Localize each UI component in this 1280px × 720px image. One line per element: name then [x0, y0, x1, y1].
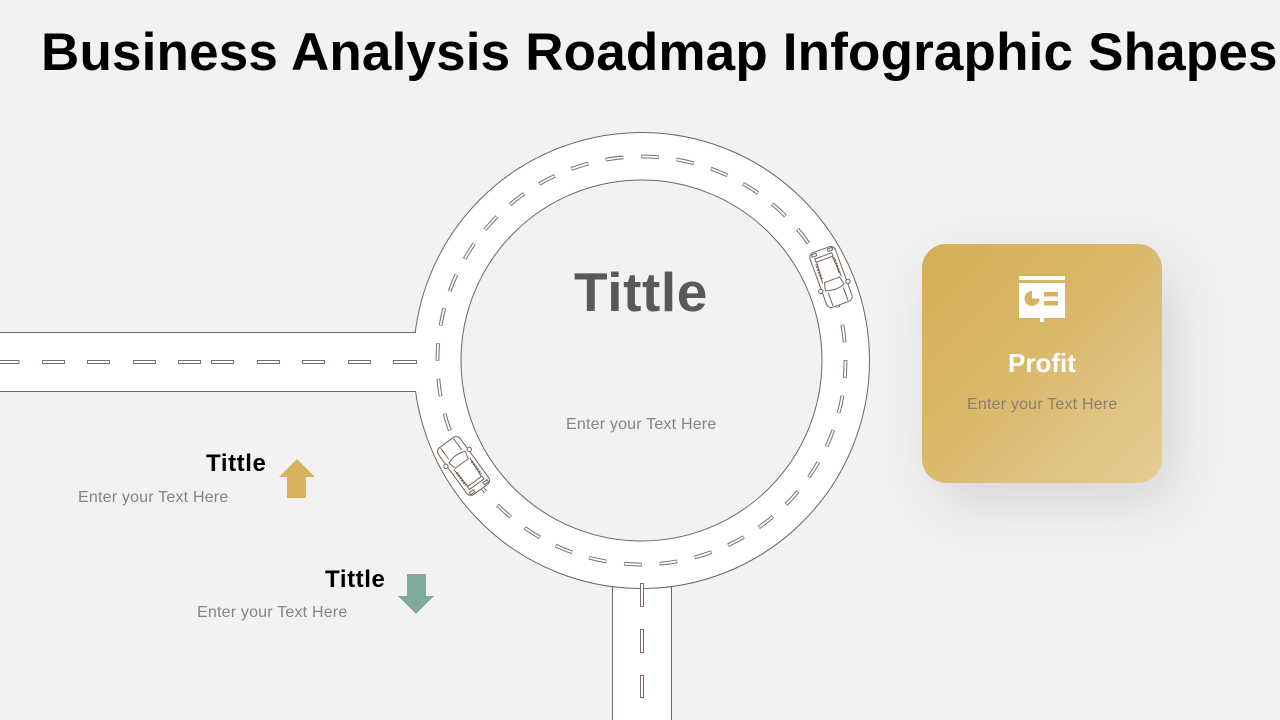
center text: Enter your Text Here [566, 416, 716, 433]
icon: gold up arrow [279, 459, 315, 498]
ring road [414, 132, 870, 588]
car: top right [805, 244, 857, 310]
left text two: Enter your Text Here [197, 604, 347, 621]
title: Business Analysis Roadmap Infographic Shapes [41, 23, 1278, 82]
left text one: Enter your Text Here [78, 489, 228, 506]
card text: Enter your Text Here [967, 396, 1117, 413]
center heading: Tittle [574, 261, 708, 323]
car: bottom left [433, 433, 494, 499]
icon: green down arrow [398, 574, 434, 614]
icon: presentation board [1019, 276, 1065, 322]
panel: profit card [922, 244, 1162, 483]
bottom road [612, 584, 672, 720]
card heading: Profit [1008, 348, 1076, 378]
left road [0, 332, 417, 392]
left heading one: Tittle [206, 450, 266, 477]
left heading two: Tittle [325, 566, 386, 593]
